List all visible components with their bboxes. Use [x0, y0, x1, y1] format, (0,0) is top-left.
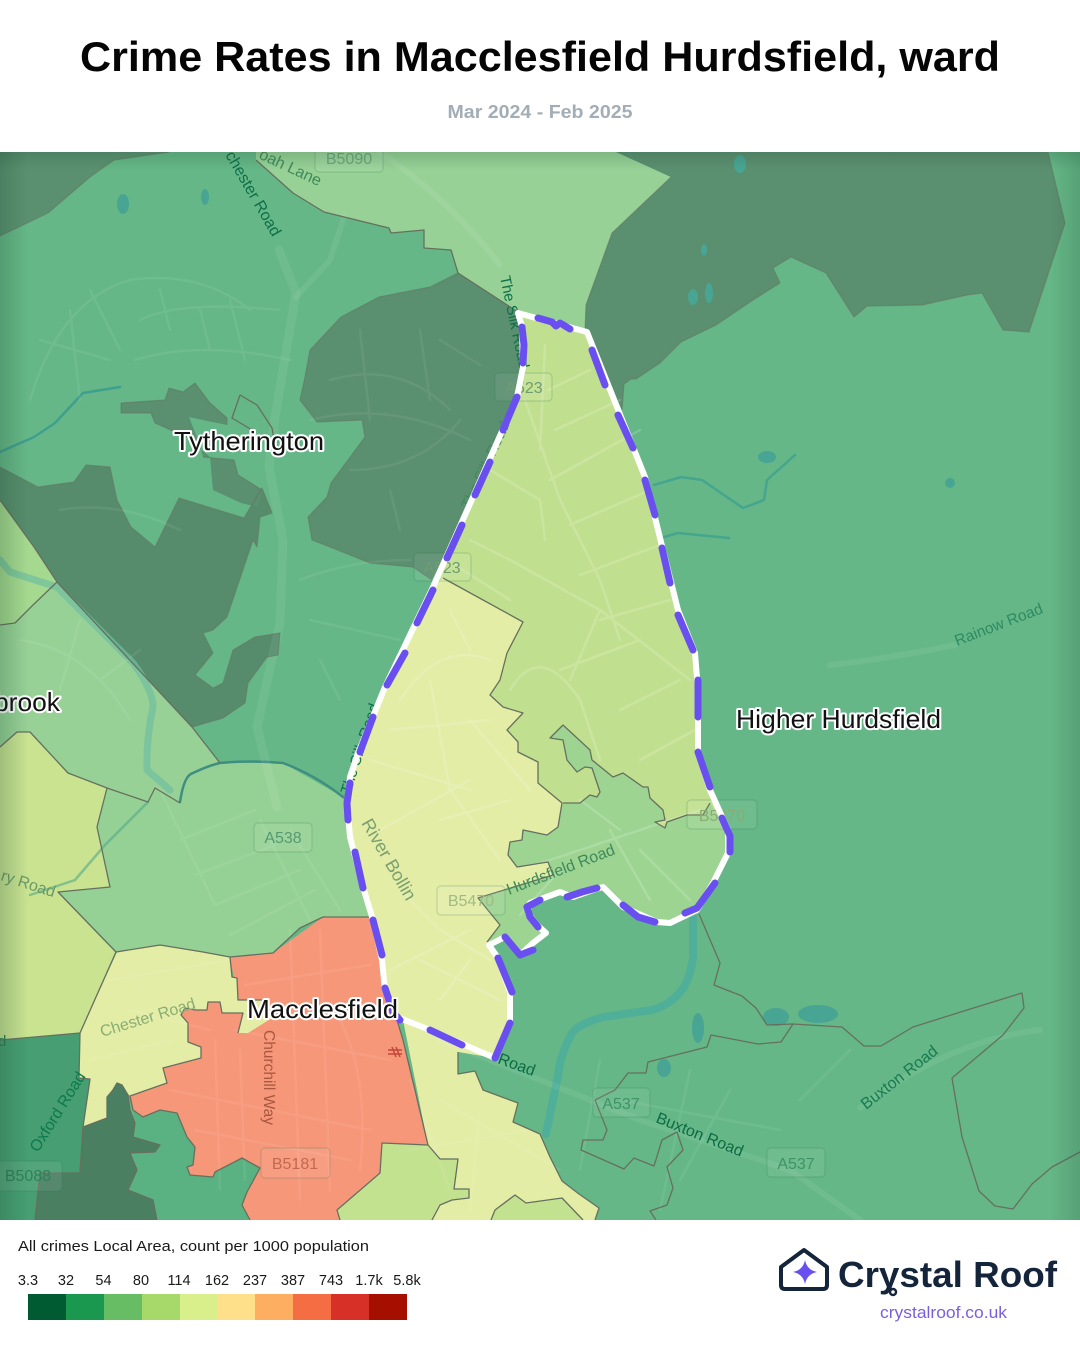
area: pale yellow Chester Road — [79, 945, 272, 1127]
legend scale values: 3.3 — [18, 1273, 38, 1289]
ward street network — [370, 345, 700, 1000]
road name labels: The Silk Road — [496, 274, 532, 370]
area: yellow green south patch two — [491, 1195, 583, 1220]
place labels: Higher Hurdsfield — [736, 704, 941, 734]
road name labels: Churchill Way — [260, 1030, 277, 1125]
legend scale values: 1.7k — [355, 1273, 383, 1289]
area: dark green patch at Tytherington — [121, 383, 262, 507]
legend scale values: 5.8k — [393, 1273, 421, 1289]
road name labels: Buxton Road — [654, 1110, 746, 1160]
logo wordmark: Crystal Roof — [838, 1254, 1058, 1295]
road name labels: Chester Road — [98, 996, 198, 1041]
ward boundary: white line with purple dashes — [347, 313, 730, 1058]
place labels: Tytherington — [174, 426, 324, 456]
road number shields: B5090 — [326, 151, 372, 168]
road number shields: A537 — [602, 1096, 640, 1113]
road name labels: Buxton Road — [858, 1043, 941, 1113]
logo: Crystal Roof — [781, 1250, 1058, 1322]
legend colour swatches — [28, 1294, 407, 1320]
road number shields: B5088 — [5, 1168, 51, 1185]
area: light green A538 — [58, 763, 373, 957]
area: mid dark green Oxford Road — [0, 1033, 90, 1220]
road name labels: Oxford Road — [27, 1069, 89, 1155]
road name labels: ry Road — [0, 868, 57, 901]
road network — [20, 152, 1040, 1220]
legend title: All crimes Local Area, count per 1000 population — [18, 1239, 369, 1255]
road name labels: Hurdsfield Road — [504, 842, 618, 899]
road name labels: oah Lane — [256, 146, 324, 190]
road name labels: chester Road — [222, 148, 284, 239]
road number shields: A537 — [777, 1156, 815, 1173]
road number shields: A538 — [264, 830, 302, 847]
road number shields: A523 — [423, 560, 461, 577]
area: pale green far west — [0, 500, 57, 625]
road number shields: B5470 — [448, 893, 494, 910]
area: dark green south of Tytherington — [0, 465, 280, 727]
area: dark green north east — [585, 152, 1065, 410]
area: light green north funnel — [256, 152, 671, 330]
ward fill: lower pale area — [347, 578, 562, 1058]
road name labels — [0, 146, 1045, 1160]
place labels — [0, 426, 941, 1024]
area: green south — [128, 1110, 260, 1220]
legend scale values: 387 — [281, 1273, 305, 1289]
area: red town centre — [130, 917, 428, 1220]
road number shields — [0, 146, 825, 1191]
legend — [18, 1239, 421, 1320]
road name labels: The Silk Road — [338, 701, 383, 796]
ward: Hurdsfield — [347, 313, 728, 1058]
icon: house with star — [781, 1250, 827, 1289]
road name labels: Rainow Road — [952, 601, 1045, 650]
legend scale values: 743 — [319, 1273, 343, 1289]
road name labels: Road — [496, 1051, 537, 1080]
neighbouring boundaries — [0, 152, 1080, 1220]
legend scale values: 80 — [133, 1273, 149, 1289]
map edge shading — [0, 152, 1080, 1220]
road number shields: B5470 — [699, 808, 745, 825]
subtitle: date range: Mar 2024 - Feb 2025 — [448, 102, 632, 122]
area: yellow green south patch one — [337, 1143, 469, 1220]
water: rivers, streams and ponds — [0, 387, 795, 1134]
ward fill: green southern area — [478, 725, 728, 955]
legend scale values: 114 — [167, 1273, 191, 1289]
area: pale yellow south — [404, 1022, 598, 1220]
legend scale values: 32 — [58, 1273, 74, 1289]
legend scale values: 237 — [243, 1273, 267, 1289]
choropleth map panel — [0, 146, 1080, 1220]
legend scale values: 54 — [95, 1273, 112, 1289]
area: dark green central north — [300, 273, 523, 580]
road name labels: River Bollin — [358, 815, 420, 904]
icon: ring on the y descender — [890, 1289, 896, 1295]
road name labels: The Silk Road — [458, 419, 513, 512]
road number shields: A523 — [505, 380, 543, 397]
area: yellow green west — [0, 732, 116, 1040]
title: Crime Rates in Macclesfield Hurdsfield, ward — [80, 33, 1000, 80]
ponds — [117, 155, 955, 1077]
area: light green west — [0, 582, 220, 803]
legend scale values — [18, 1273, 421, 1289]
icon: railway station — [388, 1047, 402, 1057]
place labels: Macclesfield — [247, 994, 398, 1024]
ward internal boundaries — [443, 578, 562, 942]
ward fill: upper area — [438, 318, 718, 942]
area: dark green south-west — [35, 1083, 160, 1220]
legend scale values: 162 — [205, 1273, 229, 1289]
road number shields: B5181 — [272, 1156, 318, 1173]
area: dark green north-west corner — [0, 152, 169, 236]
website url: crystalroof.co.uk — [880, 1304, 1008, 1322]
